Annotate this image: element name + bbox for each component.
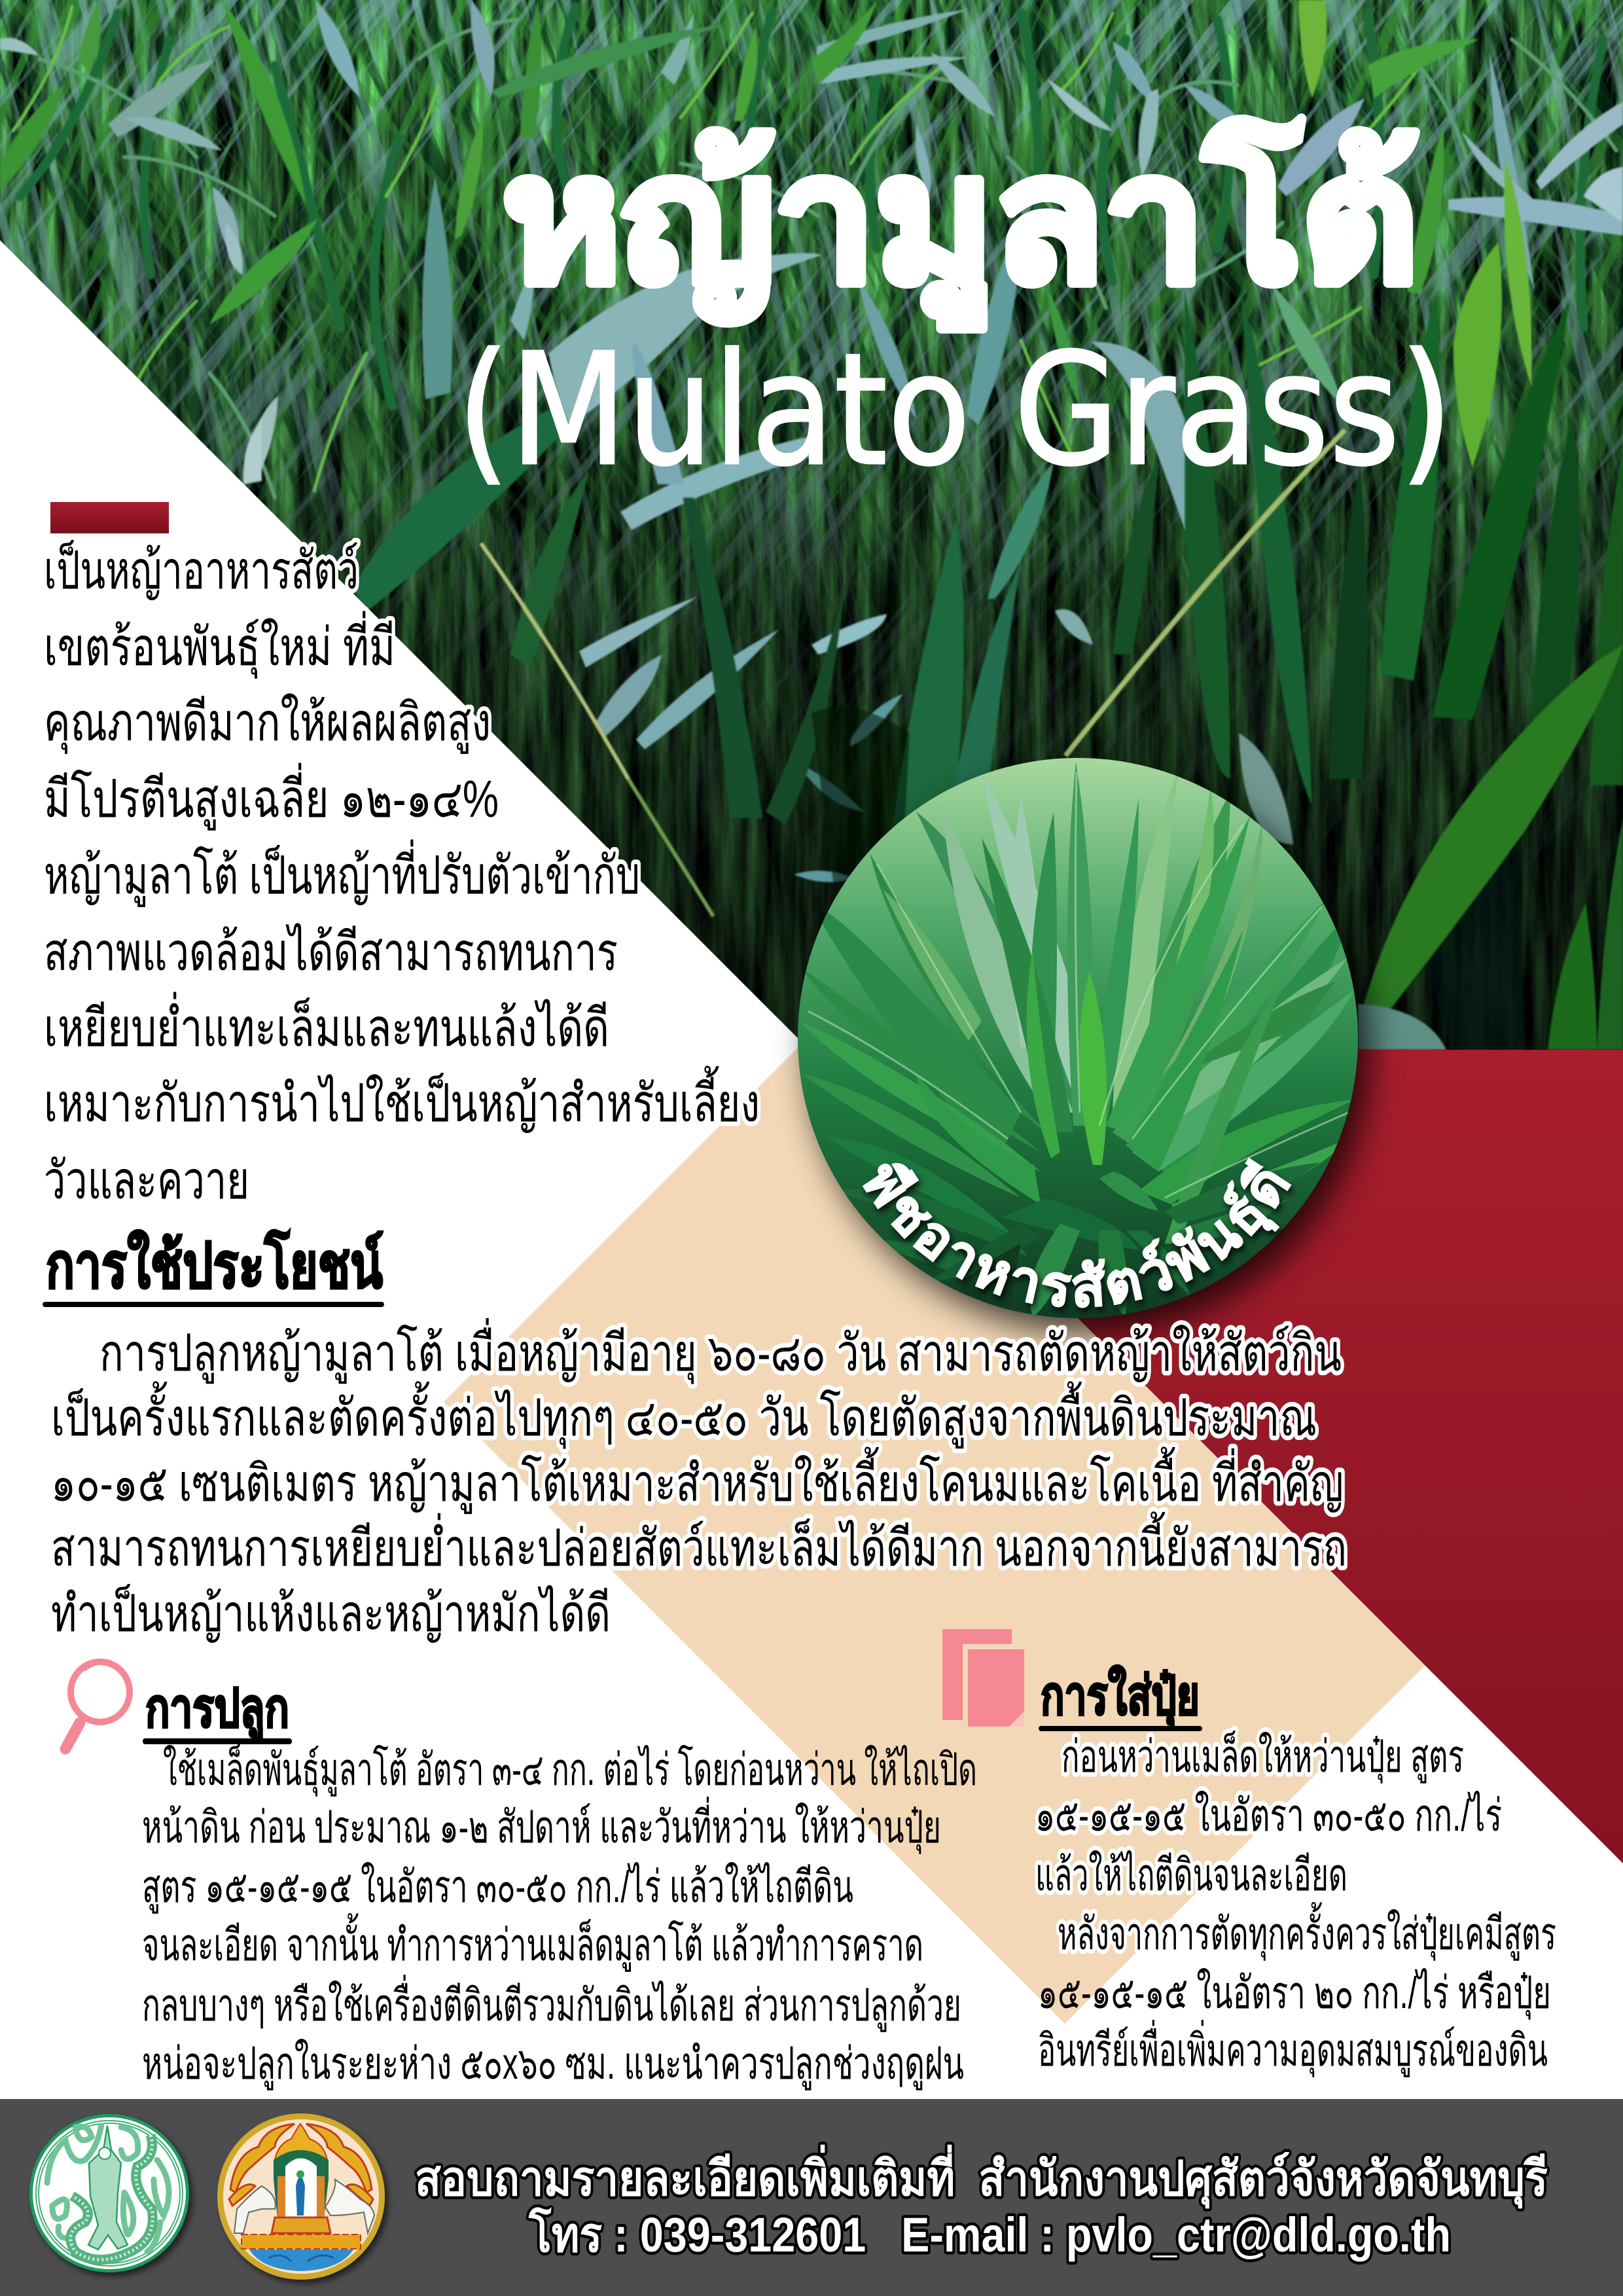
- text block: planting: [142, 1744, 977, 2090]
- text block: benefits paragraph: เป็นครั้งแรกและตัดครั้งต่อไปทุกๆ ๔๐-๕๐ วัน โดยตัดสูงจากพื้นดินประมาณ: [51, 1381, 1317, 1449]
- wide background blades: [812, 903, 1021, 1165]
- text block: planting: ใช้เมล็ดพันธุ์มูลาโต้ อัตรา ๓-๔ กก. ต่อไร่ โดยก่อนหว่าน ให้ไถเปิด: [163, 1744, 977, 1797]
- text block: introduction: เหยียบย่ำแทะเล็มและทนแล้งได้ดี: [44, 992, 609, 1057]
- text block: planting: หน่อจะปลูกในระยะห่าง ๕๐x๖๐ ซม. แนะนำควรปลูกช่วงฤดูฝน: [142, 2038, 964, 2090]
- photo circle with curved caption: [783, 747, 1394, 1359]
- logo: provincial seal: [217, 2113, 385, 2280]
- logo: green naga seal: [29, 2114, 189, 2272]
- photo: tall grass background: [0, 0, 1623, 1050]
- dark tall blades: [683, 497, 762, 818]
- red accent bar: [50, 502, 169, 533]
- text block: benefits paragraph: [51, 1318, 1347, 1643]
- text block: introduction: เหมาะกับการนำไปใช้เป็นหญ้าสำหรับเลี้ยง: [44, 1066, 760, 1133]
- pale blue blades, upper: [315, 0, 360, 98]
- teal mid blades: [966, 253, 1018, 425]
- text block: planting: กลบบางๆ หรือใช้เครื่องตีดินตีรวมกับดินได้เลย ส่วนการปลูกด้วย: [142, 1975, 961, 2032]
- footer contact text: โทร : 039-312601 E-mail : pvlo_ctr@dld.go.th: [528, 2206, 1451, 2262]
- back pale blades: [982, 772, 1106, 1113]
- heading: fertilizer: การใส่ปุ๋ย: [1041, 1665, 1200, 1729]
- text block: introduction: สภาพแวดล้อมได้ดีสามารถทนการ: [44, 923, 618, 981]
- text block: planting: สูตร ๑๕-๑๕-๑๕ ในอัตรา ๓๐-๕๐ กก./ไร่ แล้วให้ไถตีดิน: [142, 1861, 853, 1914]
- title: Thai name: หญ้ามูลาโต้: [503, 116, 1418, 329]
- red triangle panel: [810, 1050, 1623, 1863]
- text block: planting: หน้าดิน ก่อน ประมาณ ๑-๒ สัปดาห์ และวันที่หว่าน ให้หว่านปุ๋ย: [142, 1797, 941, 1854]
- bright big leaf at right: [1364, 645, 1623, 1021]
- caption: curved text: พืชอาหารสัตว์พันธุ์ดี: [862, 1157, 1296, 1314]
- text block: introduction: เขตร้อนพันธุ์ใหม่ ที่มี: [44, 611, 395, 679]
- text block: introduction: มีโปรตีนสูงเฉลี่ย ๑๒-๑๔%: [44, 763, 499, 831]
- text block: planting: จนละเอียด จากนั้น ทำการหว่านเมล็ดมูลาโต้ แล้วทำการคราด: [142, 1913, 923, 1972]
- heading: planting: การปลูก: [145, 1679, 289, 1742]
- pale arching leaf and wide dark blade: [355, 408, 569, 610]
- icon: documents: [942, 1629, 1024, 1732]
- text block: introduction: คุณภาพดีมากให้ผลผลิตสูง: [44, 692, 491, 754]
- text block: introduction: วัวและควาย: [44, 1151, 249, 1210]
- bright green blades, upper: [223, 0, 306, 206]
- beige rotated rectangle: [444, 1043, 1425, 2024]
- heading: benefits: การใช้ประโยชน์: [46, 1230, 383, 1301]
- footer band: [0, 2099, 1623, 2296]
- title: English name: (Mulato Grass): [457, 320, 1453, 500]
- icon: magnifying glass: [65, 1662, 130, 1749]
- text block: fertilizer: [1035, 1731, 1556, 2077]
- thin straws: [1065, 430, 1345, 756]
- text block: fertilizer: แล้วให้ไถตีดินจนละเอียด: [1035, 1850, 1347, 1900]
- thin far blades, upper zone: [20, 7, 1603, 406]
- footer contact text: [415, 2144, 1548, 2262]
- text block: benefits paragraph: ทำเป็นหญ้าแห้งและหญ้าหมักได้ดี: [51, 1584, 611, 1643]
- text block: introduction: [44, 539, 760, 1210]
- text block: introduction: หญ้ามูลาโต้ เป็นหญ้าที่ปรับตัวเข้ากับ: [44, 840, 640, 907]
- heading: fertilizer: [1039, 1665, 1202, 1731]
- lower blades and gaps: [812, 707, 910, 1021]
- text block: introduction: เป็นหญ้าอาหารสัตว์: [44, 539, 359, 600]
- lower tuft blades: [1001, 1198, 1139, 1250]
